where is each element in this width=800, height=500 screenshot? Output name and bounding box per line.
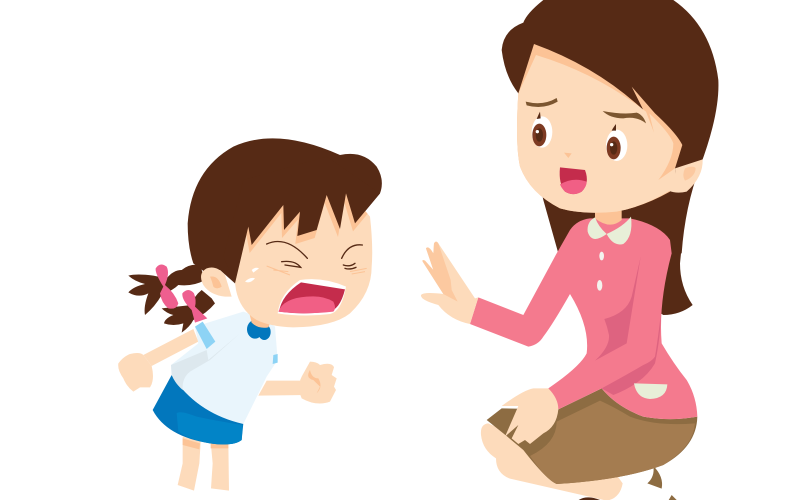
girl hair back (188, 138, 382, 283)
front arm (258, 381, 307, 396)
nose (564, 153, 572, 158)
right eye (606, 124, 627, 161)
back arm (143, 329, 198, 366)
ear (668, 159, 703, 193)
shoes (578, 466, 677, 500)
girl head (234, 185, 372, 327)
blouse (470, 218, 697, 419)
woman lower body (421, 218, 697, 500)
hand on knee (502, 388, 558, 444)
woman hair (502, 0, 718, 315)
bows (156, 265, 207, 323)
eyebrows (526, 98, 646, 123)
ear (201, 267, 232, 297)
neck (249, 313, 273, 328)
illustration: crying girl and calming woman (118, 0, 718, 500)
cheek lines (267, 266, 367, 275)
left eye (532, 112, 552, 148)
tears (245, 268, 259, 282)
figure: girl (118, 138, 382, 491)
face (517, 55, 677, 213)
fist (299, 362, 337, 404)
back hand (118, 353, 153, 392)
figure: woman (421, 0, 718, 500)
bangs (223, 157, 380, 283)
raised hand (421, 242, 478, 324)
mouth (560, 167, 587, 194)
skirt (487, 388, 697, 484)
collar (588, 217, 631, 244)
buttons (599, 252, 604, 260)
neck (595, 207, 622, 225)
face shadow (517, 44, 682, 213)
lower braid (162, 290, 215, 333)
angry eyebrows and closed eyes (267, 241, 362, 269)
bangs shadow (246, 194, 368, 253)
upper braid (128, 265, 205, 315)
legs (178, 437, 229, 491)
mouth (278, 279, 346, 316)
knee and shin (481, 423, 623, 500)
collar (247, 320, 271, 340)
pocket (634, 383, 667, 399)
woman head (517, 44, 703, 244)
skirt (153, 375, 243, 444)
shirt (171, 312, 278, 424)
sleeve cuffs (195, 322, 215, 349)
